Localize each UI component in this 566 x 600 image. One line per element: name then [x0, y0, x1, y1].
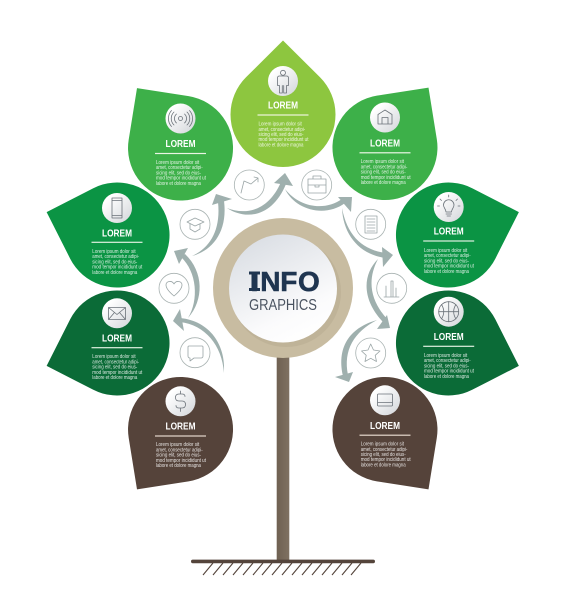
arrow 5	[285, 189, 352, 212]
leaf shape	[230, 40, 336, 167]
icon: speech bubble	[180, 338, 210, 368]
body text	[361, 159, 411, 186]
body text: sicing elit, sed do eius-	[361, 170, 406, 176]
leaf shape	[30, 277, 183, 416]
rule	[92, 242, 142, 243]
rule	[155, 153, 206, 154]
heading: LOREM	[434, 331, 464, 343]
body text: Lorem ipsum dolor sit	[156, 442, 200, 448]
arrows connecting the leaves	[173, 173, 393, 382]
panel: bottom left leaf	[95, 356, 254, 520]
body text	[156, 442, 207, 469]
body text: amet, consectetur adipi-	[361, 164, 408, 170]
icon: light bulb	[434, 192, 464, 222]
ground line with hatching	[191, 560, 375, 575]
icon: chart	[234, 170, 264, 200]
body text	[424, 353, 475, 380]
body text	[361, 442, 411, 468]
arrow 1	[173, 309, 224, 373]
body text: sicing elit, sed do eius-	[258, 132, 304, 138]
panel: middle left leaf	[30, 162, 183, 301]
heading: LOREM	[370, 420, 400, 432]
subtitle: GRAPHICS: GRAPHICS	[249, 297, 317, 314]
icon: graduation cap	[180, 209, 210, 239]
body text: sicing elit, sed do eius-	[361, 452, 406, 458]
arrow 4	[227, 173, 293, 215]
icon: heart	[159, 273, 189, 303]
central ring	[213, 218, 353, 358]
body text: labore et dolore magna	[424, 374, 469, 380]
heading: LOREM	[166, 138, 196, 150]
body text	[424, 248, 475, 275]
body text	[258, 122, 309, 148]
body text: labore et dolore magna	[258, 142, 304, 148]
body text: amet, consectetur adipi-	[361, 447, 408, 453]
body text: sicing elit, sed do eius-	[156, 170, 201, 176]
leaf shape	[382, 162, 535, 301]
body text: labore et dolore magna	[361, 180, 406, 186]
body text: amet, consectetur adipi-	[258, 127, 305, 133]
icon: envelope	[102, 298, 132, 328]
rule	[423, 346, 474, 347]
body text: Lorem ipsum dolor sit	[361, 442, 405, 448]
arrow 7	[367, 259, 390, 329]
arrow 2	[174, 248, 200, 318]
panel: upper left leaf	[95, 57, 254, 221]
panel: middle right leaf	[382, 162, 535, 301]
heading: LOREM	[102, 332, 132, 344]
body text: labore et dolore magna	[156, 463, 201, 469]
icon: person	[268, 66, 298, 96]
leaf shape	[95, 356, 254, 520]
icon: laptop	[370, 385, 400, 415]
panel: lower right leaf	[382, 277, 535, 416]
body text	[92, 354, 143, 381]
leaf shape	[95, 57, 254, 221]
central disc	[229, 234, 337, 342]
body text: labore et dolore magna	[361, 462, 406, 468]
body text: Lorem ipsum dolor sit	[424, 248, 468, 254]
icon: bar chart	[377, 273, 407, 303]
title: INFO: INFO	[251, 266, 320, 297]
leaf shape	[382, 277, 535, 416]
rule	[258, 114, 308, 116]
body text: Lorem ipsum dolor sit	[92, 249, 136, 255]
heading: LOREM	[370, 137, 400, 149]
icon: house	[370, 102, 400, 132]
rule	[155, 435, 206, 437]
tree trunk	[277, 350, 289, 562]
body text: sicing elit, sed do eius-	[156, 453, 201, 459]
body text: sicing elit, sed do eius-	[424, 258, 469, 264]
panel: upper right leaf	[312, 57, 471, 221]
body text: mod tempor incididunt ut	[424, 264, 475, 270]
body text: amet, consectetur adipi-	[156, 165, 203, 171]
leaf shape	[30, 162, 183, 301]
body text: Lorem ipsum dolor sit	[258, 122, 302, 128]
icon: smartphone	[102, 193, 132, 223]
body text	[92, 249, 143, 276]
icon: dollar	[166, 386, 196, 416]
body text	[156, 160, 207, 187]
rule	[92, 347, 142, 348]
body text: labore et dolore magna	[92, 375, 137, 381]
rule	[360, 152, 410, 153]
body text: labore et dolore magna	[156, 181, 201, 187]
body text: mod tempor incididunt ut	[424, 368, 475, 374]
body text: sicing elit, sed do eius-	[424, 363, 469, 369]
icon: basketball	[434, 297, 464, 327]
panel: lower left leaf	[30, 277, 183, 416]
icon: document	[356, 209, 386, 239]
body text: mod tempor incididunt ut	[258, 137, 309, 143]
body text: amet, consectetur adipi-	[92, 254, 139, 260]
arrow 6	[342, 208, 393, 267]
body text: labore et dolore magna	[92, 270, 137, 276]
body text: amet, consectetur adipi-	[424, 358, 471, 364]
body text: sicing elit, sed do eius-	[92, 365, 138, 371]
arrow 8	[335, 320, 377, 382]
panel: top leaf	[230, 40, 336, 167]
body text: mod tempor incididunt ut	[92, 370, 143, 376]
body text: mod tempor incididunt ut	[92, 264, 143, 270]
arrow 3	[192, 194, 232, 256]
rule	[423, 240, 474, 242]
leaf shape	[312, 356, 471, 520]
icon: briefcase	[302, 170, 332, 200]
leaf shape	[312, 57, 471, 221]
rule	[360, 435, 410, 436]
body text: amet, consectetur adipi-	[92, 359, 139, 365]
body text: Lorem ipsum dolor sit	[361, 159, 405, 165]
panel: bottom right leaf	[312, 356, 471, 520]
icon: signal	[166, 104, 196, 134]
body text: labore et dolore magna	[424, 269, 469, 275]
body text: mod tempor incididunt ut	[156, 458, 207, 464]
body text: Lorem ipsum dolor sit	[156, 160, 200, 166]
body text: mod tempor incididunt ut	[361, 175, 411, 181]
body text: sicing elit, sed do eius-	[92, 259, 138, 265]
body text: Lorem ipsum dolor sit	[92, 354, 136, 360]
body text: Lorem ipsum dolor sit	[424, 353, 468, 359]
heading: LOREM	[166, 421, 196, 433]
icon: star	[356, 338, 386, 368]
heading: LOREM	[102, 227, 132, 239]
body text: mod tempor incididunt ut	[156, 176, 207, 182]
body text: amet, consectetur adipi-	[156, 447, 203, 453]
heading: LOREM	[434, 226, 464, 238]
body text: mod tempor incididunt ut	[361, 457, 411, 463]
body text: amet, consectetur adipi-	[424, 253, 471, 259]
heading: LOREM	[268, 100, 298, 112]
